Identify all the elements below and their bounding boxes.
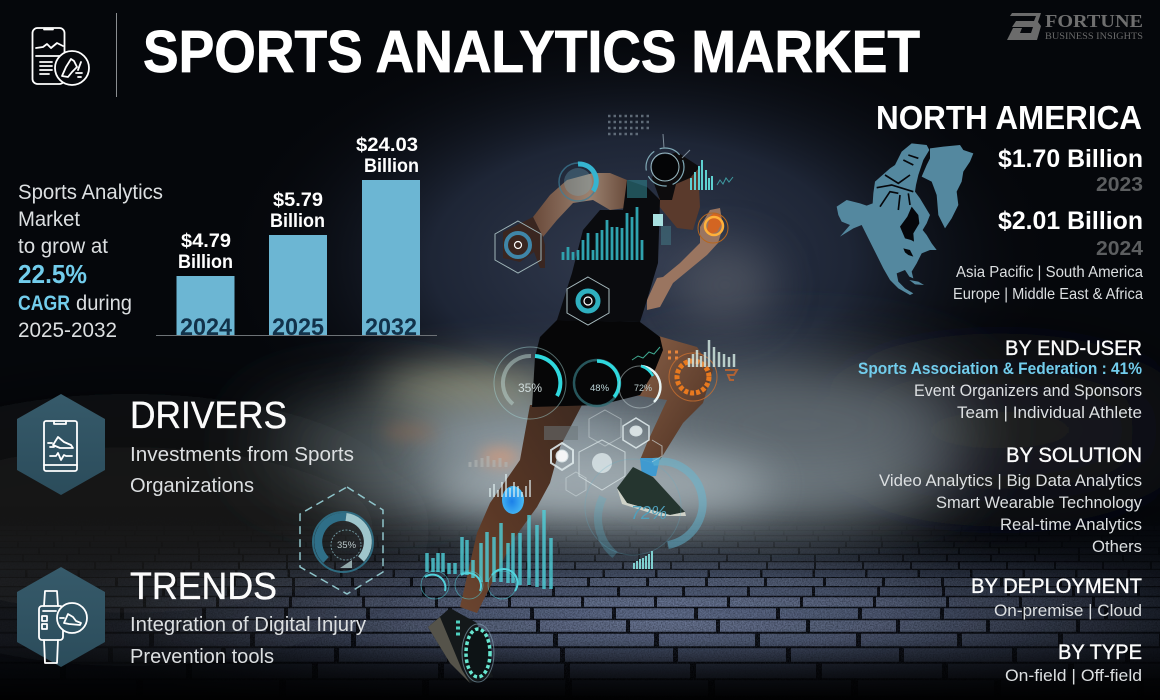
hud: gauge 72% small	[619, 366, 661, 408]
panel: trends: Prevention tools	[130, 645, 274, 668]
panel: by solution: Real-time Analytics	[1000, 516, 1142, 534]
icon: phone with sports shoe	[32, 28, 89, 85]
CAGR text block: during	[76, 292, 132, 315]
map: North America	[837, 143, 973, 295]
head	[652, 152, 700, 230]
hud: hand glow	[698, 213, 728, 243]
panel: by end-user: Team | Individual Athlete	[957, 404, 1142, 422]
panel: north america: 2024	[1096, 238, 1144, 260]
front leg	[633, 335, 713, 460]
CAGR text block: to grow at	[18, 235, 108, 258]
panel: north america	[837, 99, 1144, 303]
bar chart: market size: $4.79	[181, 231, 231, 252]
panel: by deployment: On-premise | Cloud	[994, 602, 1142, 620]
panel: north america: Asia Pacific | South America	[956, 264, 1143, 281]
panel: by solution: Others	[1092, 538, 1142, 556]
hud: orange knee ring	[669, 353, 737, 401]
panel: by end-user: Sports Association & Federation : 41%	[858, 360, 1142, 378]
shirt	[557, 180, 660, 322]
title: SPORTS ANALYTICS MARKET	[143, 19, 920, 85]
hud: gauge 72% small: 72%	[634, 383, 652, 393]
divider	[116, 13, 117, 97]
shorts	[532, 320, 663, 407]
hud: line chart on shorts	[632, 347, 660, 360]
hud: arm ring	[559, 163, 597, 201]
panel: by solution: Video Analytics | Big Data Analytics	[879, 472, 1142, 490]
bar chart: market size: $5.79	[273, 190, 323, 211]
panel: by solution	[879, 444, 1143, 556]
hud: dashed hexagon gauge 35%	[300, 487, 383, 594]
panel: drivers: Investments from Sports	[130, 443, 354, 466]
hud: head ring	[646, 134, 690, 186]
hud: knee bar chart	[689, 340, 734, 367]
hud: belly hexagon	[567, 277, 609, 325]
hud: hexagon cluster	[544, 410, 662, 496]
sock	[640, 458, 660, 476]
panel: north america: $1.70 Billion	[998, 145, 1143, 173]
panel: by end-user	[858, 337, 1142, 422]
front arm	[647, 208, 723, 310]
runner athlete	[428, 152, 723, 683]
panel: by deployment: BY DEPLOYMENT	[971, 575, 1142, 598]
hud: hand hexagon	[495, 221, 541, 273]
bar chart: market size: Billion	[364, 156, 419, 177]
panel: trends	[17, 566, 367, 668]
hud: dashed hexagon gauge 35%: 35%	[337, 540, 357, 551]
icon: hexagon phone with shoe	[17, 394, 105, 495]
logo: Fortune Business Insights: FORTUNE	[1045, 11, 1143, 31]
back shoe	[428, 608, 493, 683]
CAGR text block	[18, 181, 163, 342]
hud: gauge 48%	[574, 360, 620, 406]
hud: blue orb	[502, 486, 524, 514]
panel: by type: BY TYPE	[1058, 641, 1142, 664]
hud: chest bar chart	[563, 207, 642, 260]
logo: Fortune Business Insights: BUSINESS INSIGHTS	[1045, 32, 1143, 42]
hud: faint distant chart	[470, 456, 506, 467]
bar chart: market size: 2024	[180, 314, 233, 341]
hud: head bar chart	[691, 160, 712, 190]
hud: lower bar chart	[427, 510, 551, 589]
panel: by end-user: BY END-USER	[1005, 337, 1142, 360]
bar chart: market size: $24.03	[356, 135, 418, 156]
hud: large gauge 72%: 72%	[631, 503, 667, 523]
hud: shoe ring	[462, 624, 494, 682]
panel: trends: TRENDS	[130, 566, 277, 608]
hud: squiggle	[717, 177, 733, 185]
hud: small rings row	[421, 569, 518, 599]
panel: drivers: DRIVERS	[130, 395, 287, 437]
bar chart: market size	[156, 135, 437, 341]
panel: by deployment	[971, 575, 1142, 620]
bar chart: market size: Billion	[178, 252, 233, 273]
rear arm	[503, 173, 627, 268]
panel: drivers	[17, 394, 354, 497]
panel: north america: Europe | Middle East & Africa	[953, 286, 1143, 303]
front shoe	[617, 467, 686, 516]
panel: drivers: Organizations	[130, 474, 254, 497]
panel: north america: NORTH AMERICA	[876, 99, 1142, 136]
logo: Fortune Business Insights	[1007, 11, 1143, 42]
CAGR text block: CAGR	[18, 292, 70, 315]
CAGR text block: Market	[18, 208, 80, 231]
hud: gauge 35%: 35%	[518, 381, 542, 395]
back leg	[460, 405, 582, 613]
icon: hexagon watch with shoe	[17, 567, 105, 667]
background: misty horizon	[260, 245, 970, 535]
hud: gauge 48%: 48%	[590, 383, 610, 394]
hud: small gauge chart	[634, 551, 652, 569]
hud: dots panel	[608, 116, 650, 134]
CAGR text block: 2025-2032	[18, 319, 117, 342]
bar chart: market size: 2025	[272, 314, 324, 341]
CAGR text block: Sports Analytics	[18, 181, 163, 204]
hud: gauge 35%	[494, 347, 566, 419]
hud: orange dots	[668, 352, 678, 358]
panel: by type	[1005, 641, 1142, 685]
hud: large gauge 72%	[585, 459, 703, 555]
bar chart: market size: Billion	[270, 211, 325, 232]
hud: mid bar chart	[490, 474, 530, 497]
CAGR text block: 22.5%	[18, 259, 87, 289]
panel: north america: $2.01 Billion	[998, 207, 1143, 235]
HUD graphics over runner	[300, 116, 737, 682]
panel: by type: On-field | Off-field	[1005, 667, 1142, 685]
panel: trends: Integration of Digital Injury	[130, 613, 367, 636]
panel: by solution: Smart Wearable Technology	[936, 494, 1143, 512]
hud: shoulder badges	[627, 180, 671, 245]
background: brick pavement	[0, 529, 1160, 700]
bar chart: market size: 2032	[365, 314, 417, 341]
panel: north america: 2023	[1096, 174, 1143, 196]
panel: by end-user: Event Organizers and Sponsors	[914, 382, 1142, 400]
panel: by solution: BY SOLUTION	[1006, 444, 1142, 467]
